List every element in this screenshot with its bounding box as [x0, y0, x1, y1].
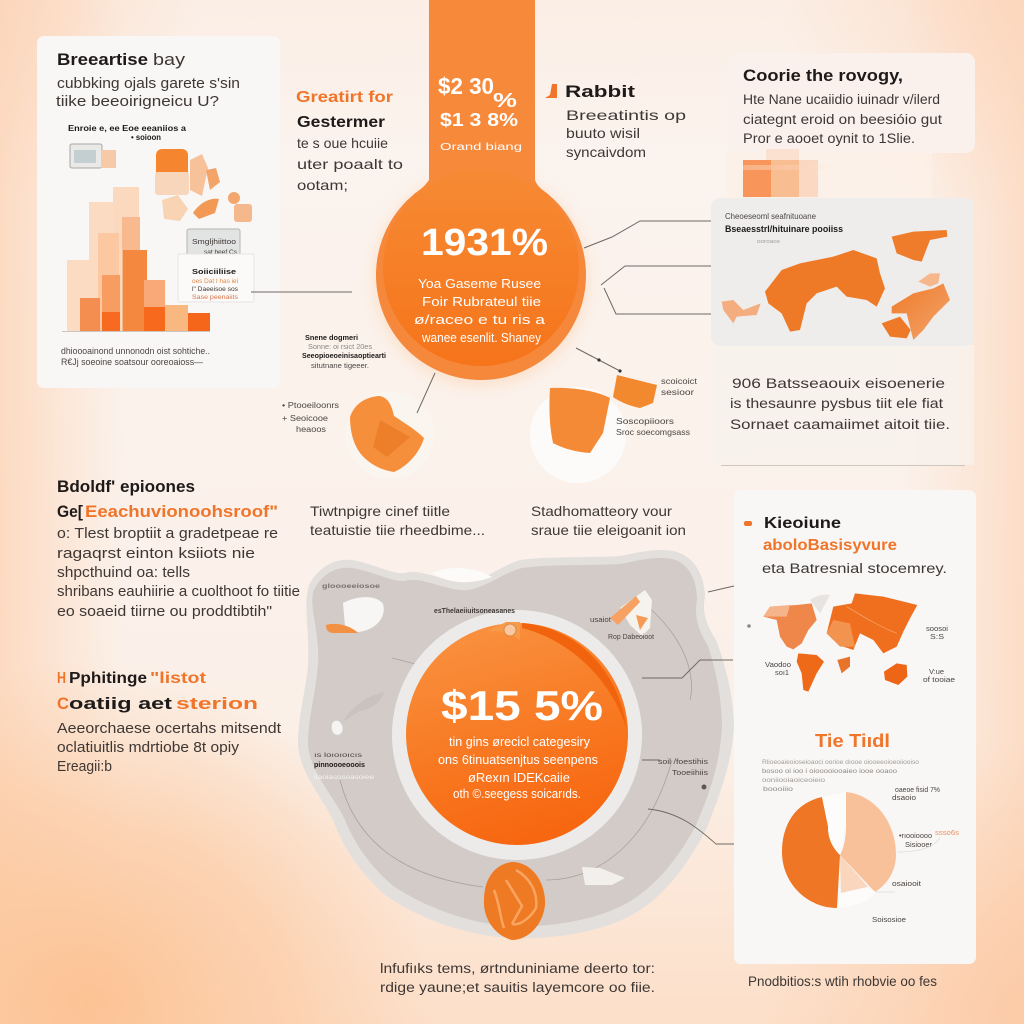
text block: greatirt for: ootam; — [297, 177, 348, 193]
pie labels: ssso6s — [935, 830, 960, 837]
heading: top left card: cubbking ojals garete s'sin — [57, 75, 240, 92]
banner figures: $1 3 8% — [440, 110, 518, 130]
text block: pphitinge — [57, 670, 281, 775]
faded bars — [743, 149, 843, 197]
footer text: Pnodbitios:s wtih rhobvie oo fes — [748, 973, 937, 989]
blob labels: ıs loıoıoıcıs — [314, 752, 363, 759]
text block: bold epioones: Bdoldf' epioones — [57, 478, 195, 496]
map labels: S:S — [930, 634, 944, 641]
labels around small icons: scoicoict — [661, 377, 698, 386]
text block: bold epioones — [57, 478, 300, 620]
map description: is thesaunre pysbus tiit ele fiat — [730, 395, 943, 411]
icon: orange bubble left — [346, 391, 434, 479]
text block: pphitinge: sterion — [176, 695, 258, 713]
body: top right: Hte Nane ucaiidio iuinadr v/ilerd — [743, 92, 940, 107]
central description: Foir Rubrateul tiie — [422, 294, 541, 309]
text block: bold epioones: o: Tlest broptiit a gradetpeae re — [57, 526, 278, 542]
panel: world map card — [711, 198, 974, 466]
panel: top left bar chart card — [37, 36, 280, 388]
icon: white cup with orange base: gloooeeiosoe — [322, 583, 381, 590]
centre description: ons 6tinuatsenjtus seenpens — [438, 753, 598, 767]
map heading: Bseaesstrl/hituinare pooiiss — [725, 224, 843, 235]
text block: bold epioones: ragaqrst einton ksiiots nie — [57, 546, 255, 562]
label: small chart note — [68, 123, 186, 142]
pie labels: Soisosioe — [872, 915, 906, 924]
heading: right card: eta Batresnial stocemrey. — [762, 561, 947, 576]
icon: white cup with orange base — [322, 583, 384, 633]
labels around small icons: Snene dogmeri — [305, 333, 358, 342]
text block: bottom caption: lnfufiıks tems, ørtnduniniame deerto tor: — [380, 961, 655, 976]
text block: pphitinge: C — [57, 695, 69, 713]
pie labels: osaiooit — [892, 881, 921, 888]
text block: middle left note: Tiwtnpigre cinef tiitle — [310, 503, 450, 519]
pie labels: •rıooioooo — [899, 833, 932, 840]
text block: greatirt for: Gestermer — [297, 114, 385, 131]
blob labels: usaiot — [590, 615, 612, 624]
chart description: bosoo oi ioo i oiooooiooaieo iooe ooaoo — [762, 768, 897, 775]
central description: ø/raceo e tu ris a — [414, 312, 546, 327]
callout: chart annotation: l" Daeeisoe sos — [192, 286, 239, 293]
panel: central orange banner and circle — [373, 0, 589, 387]
text block: rabbit: syncaivdom — [566, 144, 646, 160]
panel: grey blob diagram — [298, 550, 736, 940]
text block: pphitinge: Aeeorchaese ocertahs mitsendt — [57, 721, 281, 737]
text block: rabbit: Rabbit — [565, 82, 635, 101]
caption: chart: R€Jj soeoine soatsour ooreoaioss— — [61, 357, 203, 367]
pie labels: Sisiooer — [905, 842, 933, 849]
map description — [730, 375, 950, 432]
centre circle — [406, 622, 628, 845]
icon: orange white shape — [610, 590, 652, 636]
labels around small icons: situtnane tigeeer. — [311, 361, 369, 370]
text block: bold epioones: Eeachuvionoohsroof" — [85, 503, 278, 521]
text block: middle right note: Stadhomatteory vour — [531, 503, 672, 519]
chart description — [762, 759, 919, 793]
heading: top left card: tiike beeoirigneicu U? — [56, 93, 219, 110]
text block: bold epioones: shpcthuind oa: tells — [57, 565, 190, 581]
map heading — [725, 211, 843, 245]
chart description: boooiiio — [763, 786, 793, 793]
banner figures: % — [493, 90, 517, 112]
map labels: soosoi — [926, 626, 948, 633]
pie chart — [782, 792, 896, 908]
ring and orange circle — [392, 610, 642, 860]
banner figures: Orand biang — [440, 142, 522, 153]
banner figures — [438, 73, 522, 153]
labels around small icons: + Seoicooe — [282, 414, 329, 423]
map heading: Cheoeseoml seafnituoane — [725, 211, 816, 221]
labels around small icons: Seeopioeoeinisaoptiearti — [302, 351, 386, 360]
text block: bold epioones: shribans eauhiirie a cuolthoot fo tiitie — [57, 584, 300, 600]
world map — [763, 593, 917, 692]
blob labels: liaoiasosoasoiee — [314, 774, 374, 781]
heading: top left card: bay — [153, 50, 186, 69]
panel: right tall card — [734, 490, 976, 964]
blob labels: esThelaeiiuitsoneasanes — [434, 608, 515, 615]
map labels: V:ue — [929, 669, 944, 676]
heading: top right: Coorie the rovogy, — [743, 66, 903, 85]
text block: rabbit — [545, 82, 686, 160]
text block: bold epioones: eo soaeid tiirne ou proddtibtih" — [57, 604, 272, 620]
map description: 906 Batsseaouix eisoenerie — [732, 375, 945, 391]
central description — [414, 276, 546, 345]
text block: greatirt for: uter poaalt to — [297, 156, 403, 172]
pie labels: dsaoio — [892, 795, 916, 802]
icon: white chip — [582, 867, 625, 885]
text block: bold epioones: Ge[ — [57, 503, 83, 521]
map labels — [747, 624, 955, 684]
label: small chart note: Enroie e, ee Eoe eeaniios a — [68, 123, 186, 133]
text block: rabbit: buuto wisil — [566, 125, 640, 141]
icon: white drop — [332, 692, 384, 735]
map labels: Vaodoo — [765, 662, 791, 669]
map — [722, 230, 950, 340]
body: top right: ciategnt eroid on beesióio gut — [743, 112, 942, 127]
callout: chart annotation: oes Dat I has iei — [192, 278, 238, 285]
text block: middle right note — [531, 503, 686, 538]
text block: middle left note: teatuistie tiie rheedbime... — [310, 522, 485, 538]
labels around small icons: heaoos — [296, 425, 326, 434]
labels around small icons: Sroc soecomgsass — [616, 428, 690, 437]
chart description: Rlioeoaieoioseioaoci oorioe dıooe oiooeeoioeoiiooiso — [762, 759, 919, 766]
arrow: chart to centre — [251, 291, 352, 293]
labels around small icons: Soscopiioors — [616, 417, 674, 426]
central description: wanee esenlit. Shaney — [421, 330, 541, 345]
caption: chart: dhioooainond unnonodn oist sohtiche.. — [61, 346, 210, 356]
heading: right card: aboloBasisyvure — [763, 537, 897, 554]
banner figures: $2 30 — [438, 73, 494, 99]
centre description — [438, 735, 598, 801]
text block: bottom caption: rdige yaune;et sauitis layemcore oo fiie. — [380, 980, 655, 995]
panel: top right text card — [727, 53, 975, 210]
text block: pphitinge: "listot — [150, 670, 206, 687]
caption: chart — [61, 346, 210, 367]
callout: chart annotation: Soiiciiliise — [192, 267, 236, 276]
icon: grey note: Smgljhiittoo — [192, 239, 236, 246]
notch highlight — [432, 568, 492, 582]
callout: chart annotation — [178, 254, 254, 302]
centre description: oth ©.seegess soicarıds. — [453, 787, 581, 801]
icon: grey note — [187, 229, 240, 263]
central figure: 1931% — [421, 222, 548, 264]
blob labels: pinnoooeooois — [314, 762, 365, 769]
blob labels — [314, 608, 709, 790]
body: top right: Pror e aooet oynit to 1Slie. — [743, 131, 915, 146]
heading: right card — [744, 515, 947, 576]
labels around small icons — [282, 333, 698, 437]
labels around small icons: sesioor — [661, 388, 694, 397]
map labels: soı1 — [775, 670, 789, 677]
icon: orange jars — [155, 149, 252, 222]
text block: greatirt for: Greatirt for — [296, 89, 393, 106]
heading: top left card: Breeartise — [57, 50, 148, 69]
text block: pphitinge: oclatiuitlis mdrtiobe 8t opiy — [57, 740, 240, 756]
blob labels: soil /foestihis — [658, 759, 709, 766]
labels around small icons: • Ptooeiloonrs — [282, 401, 339, 410]
big figure: $15 5% — [441, 682, 603, 729]
pie labels — [872, 787, 960, 924]
chart description: ooniiooiaoiceoieio — [762, 777, 825, 784]
text block: bottom caption — [380, 961, 655, 995]
text block: greatirt for — [296, 89, 403, 193]
centre description: øRexın IDEKcaiie — [468, 771, 570, 785]
heading: right card: Kieoiune — [764, 515, 841, 532]
centre description: tin gins ørecicl categesiry — [449, 735, 591, 749]
icon: grey note: sat beef Cs — [204, 250, 237, 256]
blob labels: Rop Dabeoioot — [608, 634, 654, 641]
text block: pphitinge: Pphitinge — [69, 670, 147, 687]
body: top right — [743, 92, 942, 146]
heading: top left card — [56, 50, 240, 110]
map description: Sornaet caamaiimet aitoit tiie. — [730, 416, 950, 432]
icon: orange bubble right — [530, 375, 657, 483]
icon: orange nut — [484, 862, 545, 940]
central description: Yoa Gaseme Rusee — [418, 276, 541, 291]
icon: document card — [70, 144, 116, 168]
text block: middle left note — [310, 503, 485, 538]
text block: middle right note: sraue tiie eleigoanit ion — [531, 522, 686, 538]
text block: rabbit: Breeatintis op — [566, 107, 686, 123]
chart title: Tie Tiıdl — [815, 731, 890, 751]
labels around small icons: Sonne: oi rsict 20es — [308, 344, 373, 351]
decorative arcs and connectors — [340, 586, 736, 887]
text block: pphitinge: oatiig aet — [69, 695, 173, 713]
text block: pphitinge: H — [57, 670, 66, 687]
blob labels: Tooeiihiis — [672, 770, 709, 777]
connector lines to map — [584, 221, 711, 314]
callout: chart annotation: Sase peenaiits — [192, 294, 239, 301]
pie labels: oaeoe fisid 7% — [895, 787, 940, 794]
label: small chart note: • soioon — [131, 133, 161, 142]
bar chart — [62, 187, 210, 332]
text block: greatirt for: te s oue hcuiie — [297, 135, 388, 151]
text block: pphitinge: Ereagii:b — [57, 759, 112, 775]
map heading: ooroaos — [757, 239, 780, 245]
map labels: of tooiae — [923, 677, 955, 684]
